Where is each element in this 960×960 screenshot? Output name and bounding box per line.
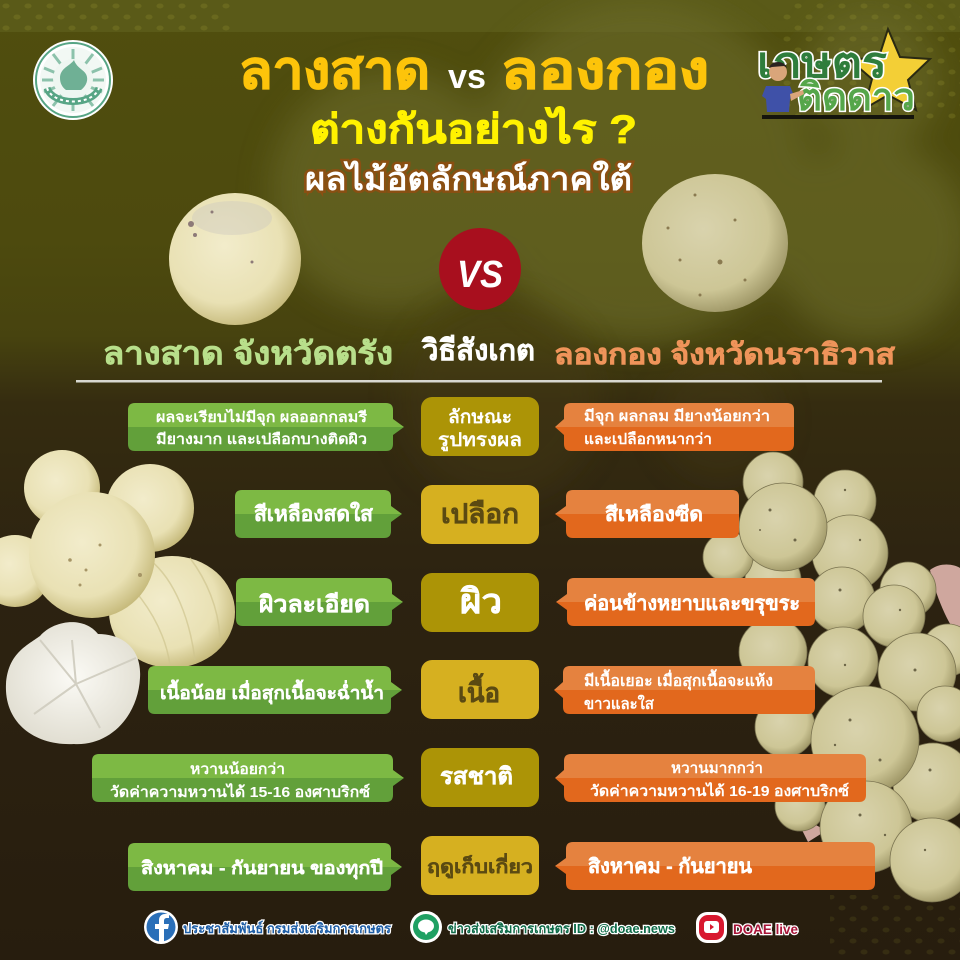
right bubble [554, 666, 815, 714]
icon: youtube [696, 912, 727, 943]
logo wordmark [757, 39, 915, 119]
icon: line [410, 911, 442, 943]
left text: ผลจะเรียบไม่มีจุก ผลออกกลมรี [156, 408, 367, 426]
fruit: longkong top [642, 174, 788, 312]
center label: ฤดูเก็บเกี่ยว [427, 853, 533, 879]
heading: lang sat trang: ลางสาด จังหวัดตรัง [103, 336, 393, 371]
title: longkong: ลองกอง [501, 42, 709, 100]
right bubble [555, 490, 739, 538]
right text: มีจุก ผลกลม มียางน้อยกว่า [584, 408, 770, 426]
row: peel [235, 485, 739, 544]
right bubble [555, 842, 875, 890]
center label: เนื้อ [458, 672, 500, 708]
title: lang sat: ลางสาด [239, 42, 430, 100]
fruit: lang sat top [169, 193, 301, 325]
right text: สิงหาคม - กันยายน [588, 856, 752, 878]
center label: ลักษณะ [448, 406, 512, 427]
right text: มีเนื้อเยอะ เมื่อสุกเนื้อจะแห้ง [584, 669, 773, 691]
center label [421, 836, 539, 895]
center label [421, 748, 539, 807]
left text [156, 408, 367, 448]
fruit: peeled lang sat [6, 622, 140, 744]
row: harvest season [128, 836, 875, 895]
center label [421, 660, 539, 719]
left text: หวานน้อยกว่า [190, 761, 285, 778]
left bubble [128, 843, 402, 891]
left bubble [128, 403, 404, 451]
fruit cluster: lang sat left [0, 450, 235, 744]
logo wordmark: ติดดาว [797, 77, 915, 119]
row: flesh [148, 660, 815, 719]
logo: department emblem [33, 40, 113, 120]
right text: วัดค่าความหวานได้ 16-19 องศาบริกซ์ [590, 781, 849, 800]
right text: และเปลือกหนากว่า [584, 431, 712, 448]
logo wordmark: เกษตร [757, 39, 887, 86]
center label: รูปทรงผล [438, 429, 522, 452]
right text [584, 408, 770, 448]
heading: longkong narathiwat: ลองกอง จังหวัดนราธิวาส [554, 339, 895, 371]
center label [421, 573, 539, 632]
subtitle: how different: ต่างกันอย่างไร ? [310, 106, 637, 152]
footer [144, 910, 798, 944]
right bubble [555, 754, 866, 802]
left bubble [92, 754, 404, 802]
row: taste [92, 748, 866, 807]
icon: star [850, 29, 930, 110]
icon: vs badge [439, 228, 521, 310]
icon: facebook [144, 910, 178, 944]
title: vs: vs [448, 58, 486, 96]
center label: เปลือก [441, 499, 519, 529]
row: fruit shape [128, 397, 794, 456]
right text: ค่อนข้างหยาบและขรุขระ [584, 592, 800, 616]
right text: สีเหลืองซีด [605, 503, 703, 526]
right text [584, 669, 773, 713]
left bubble [236, 578, 403, 626]
title [239, 42, 709, 197]
icon: farmer character [762, 62, 804, 112]
right bubble [555, 403, 794, 451]
facebook text: ประชาสัมพันธ์ กรมส่งเสริมการเกษตร [183, 920, 392, 936]
left text [110, 761, 370, 801]
fruit cluster: longkong right [703, 452, 960, 902]
subtitle: southern fruits: ผลไม้อัตลักษณ์ภาคใต้ [305, 160, 632, 197]
right text: ขาวและใส [584, 694, 655, 713]
youtube text: DOAE live [733, 922, 798, 937]
left bubble [235, 490, 402, 538]
left bubble [148, 666, 402, 714]
left text: ผิวละเอียด [258, 591, 370, 617]
center label [421, 485, 539, 544]
left text: สิงหาคม - กันยายน ของทุกปี [141, 858, 383, 880]
left text: สีเหลืองสดใส [254, 501, 373, 526]
center label: ผิว [460, 583, 502, 621]
left text: มียางมาก และเปลือกบางติดผิว [156, 431, 367, 448]
right text: หวานมากกว่า [671, 760, 763, 777]
icon: vs badge: VS [457, 254, 503, 296]
center label [421, 397, 539, 456]
right bubble [556, 578, 815, 626]
line text: ข่าวส่งเสริมการเกษตร ID : @doae.news [448, 921, 675, 936]
row: skin [236, 573, 815, 632]
left text: เนื้อน้อย เมื่อสุกเนื้อจะฉ่ำน้ำ [160, 679, 384, 705]
logo: kaset tid dao [757, 29, 930, 119]
left text: วัดค่าความหวานได้ 15-16 องศาบริกซ์ [110, 782, 370, 801]
center label: รสชาติ [440, 763, 513, 789]
right text [590, 760, 849, 800]
heading: observation method: วิธีสังเกต [421, 335, 535, 367]
